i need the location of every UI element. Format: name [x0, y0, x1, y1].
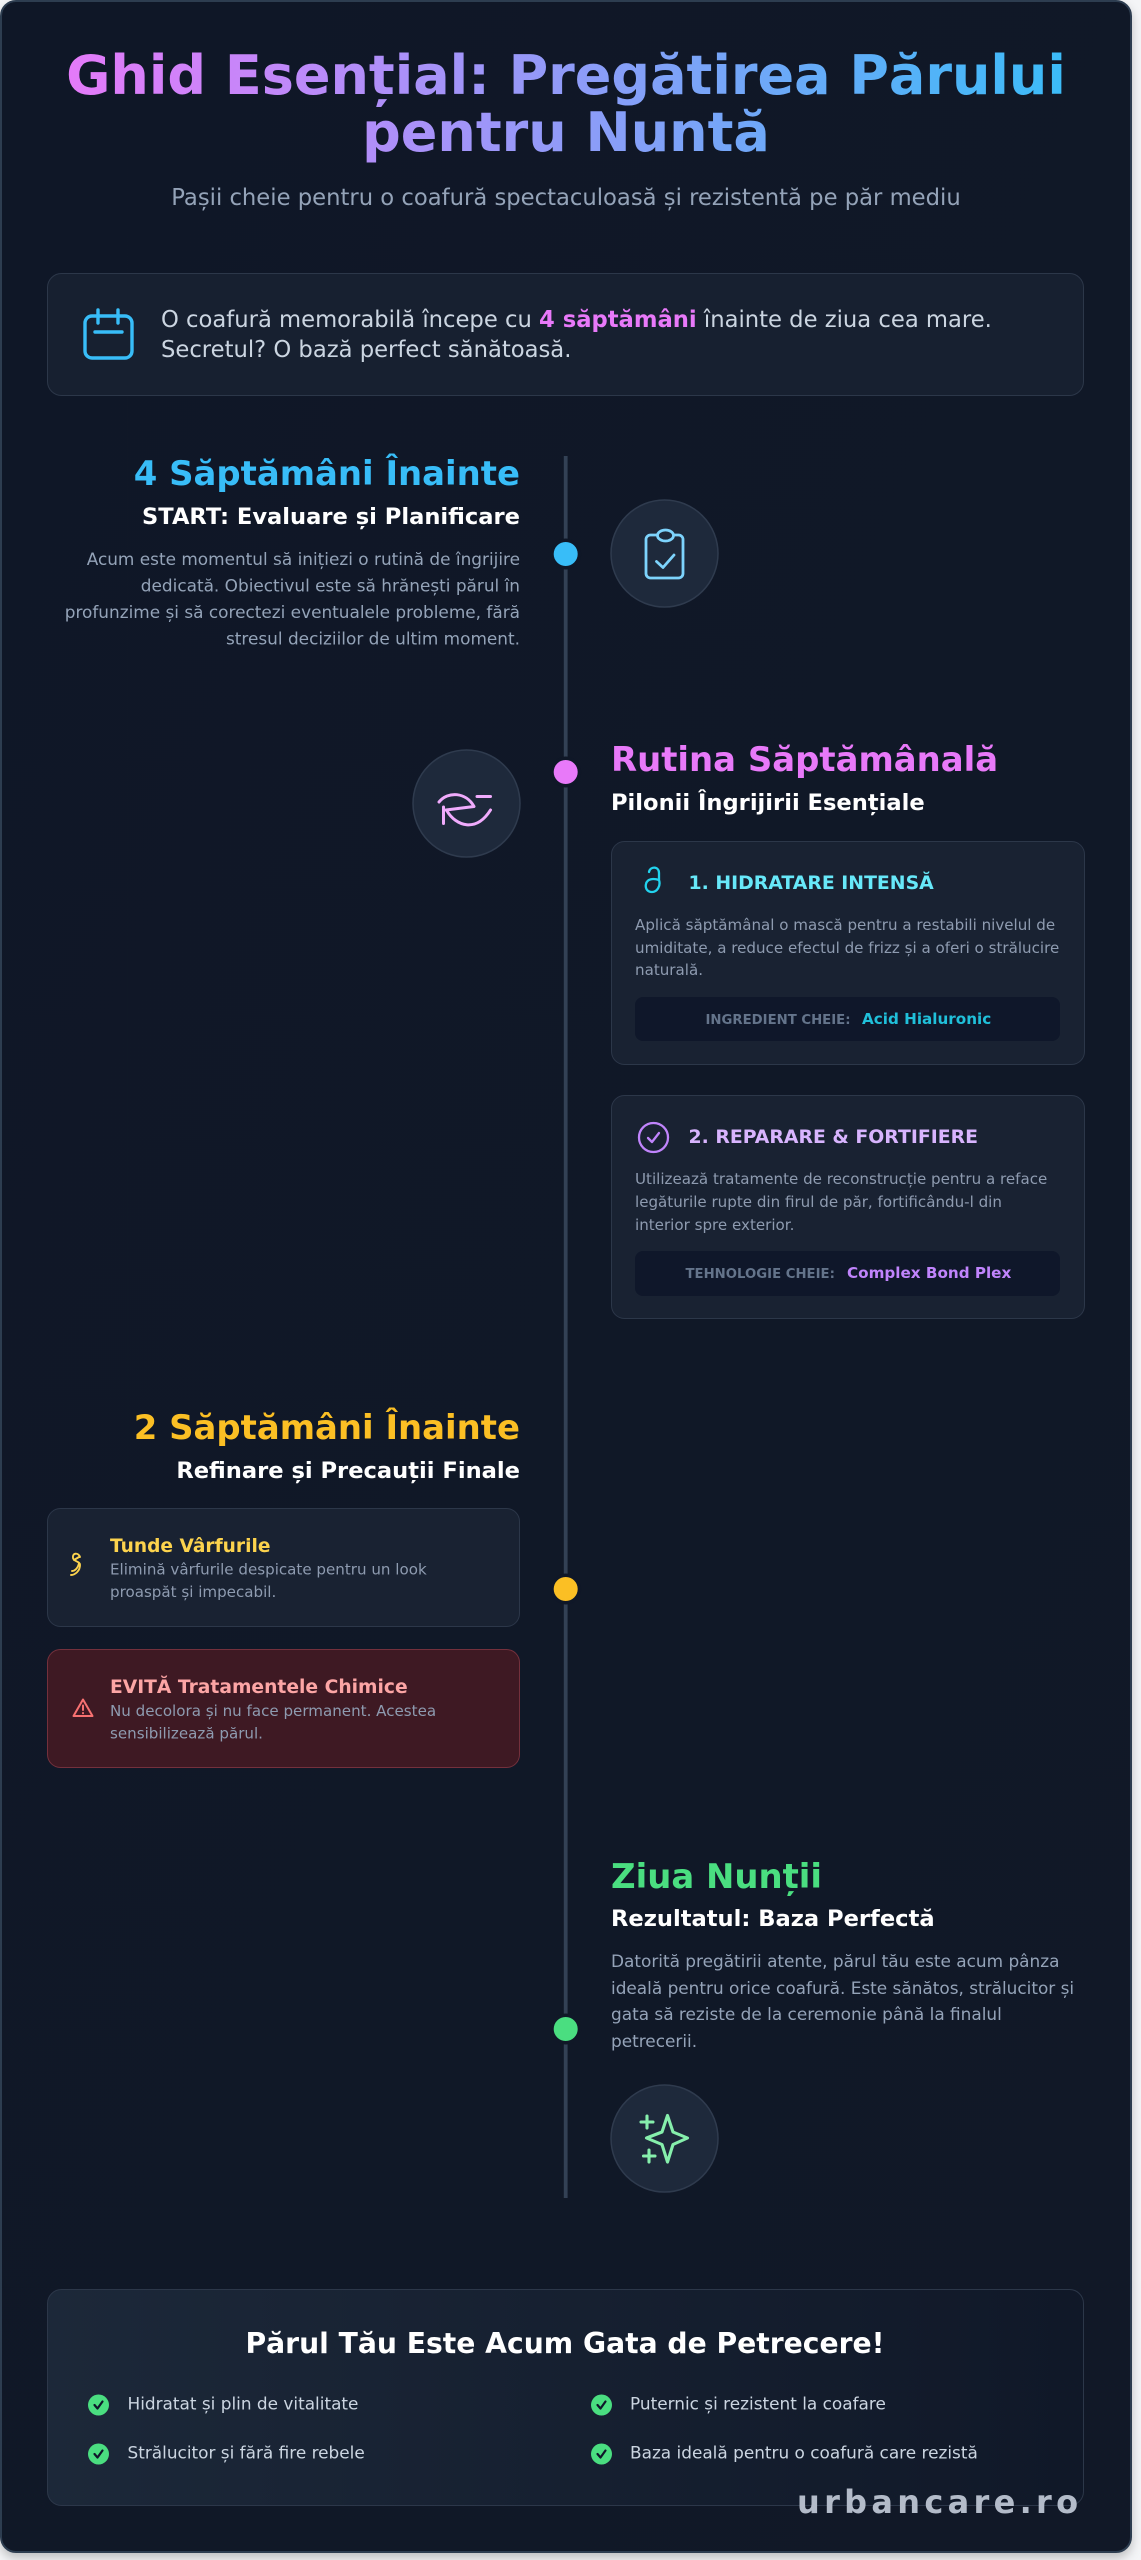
- summary heading: Părul Tău Este Acum Gata de Petrecere!: [245, 2327, 885, 2360]
- card text: Utilizează tratamente de reconstrucție pentru a reface: [635, 1170, 1047, 1188]
- key ingredient: [635, 997, 1060, 1041]
- card text: [635, 1170, 1047, 1234]
- heading: Rutina Săptămânală: [611, 740, 998, 779]
- key ingredient: INGREDIENT CHEIE:: [706, 1013, 851, 1028]
- subheading: START: Evaluare și Planificare: [142, 504, 520, 530]
- icon: warning: [74, 1700, 92, 1716]
- section: 2 weeks before: [48, 1407, 520, 1768]
- card text: sensibilizează părul.: [110, 1724, 263, 1742]
- card: repair: [612, 1096, 1084, 1318]
- key technology: TEHNOLOGIE CHEIE:: [686, 1267, 835, 1282]
- description: profunzime și să corectezi eventualele probleme, fără: [65, 602, 520, 622]
- item: hydrated: Hidratat și plin de vitalitate: [128, 2394, 358, 2414]
- timeline dot: 4 weeks: [550, 538, 581, 570]
- title: [66, 44, 1066, 164]
- description: [65, 549, 520, 648]
- watermark: urbancare.ro: [797, 2483, 1082, 2521]
- item: strong: Puternic și rezistent la coafare: [630, 2394, 886, 2414]
- key technology: [635, 1251, 1060, 1296]
- description: [611, 1951, 1074, 2051]
- card text: [110, 1702, 436, 1742]
- key ingredient: Acid Hialuronic: [862, 1010, 991, 1028]
- icon: hair strand: [646, 868, 660, 892]
- icon: sparkle: [611, 2085, 718, 2192]
- card text: naturală.: [635, 961, 703, 979]
- timeline dot: 2 weeks: [550, 1574, 581, 1604]
- intro text: Secretul? O bază perfect sănătoasă.: [161, 337, 571, 363]
- description: Acum este momentul să inițiezi o rutină de îngrijire: [87, 549, 520, 569]
- card title: EVITĂ Tratamentele Chimice: [110, 1674, 408, 1698]
- heading: 2 Săptămâni Înainte: [134, 1407, 520, 1447]
- card text: [110, 1560, 427, 1601]
- description: gata să reziste de la ceremonie până la finalul: [611, 2004, 1002, 2024]
- subtitle: Pașii cheie pentru o coafură spectaculoasă și rezistentă pe păr mediu: [171, 185, 961, 211]
- card text: legăturile rupte din firul de păr, fortificându-l din: [635, 1193, 1002, 1211]
- card title: Tunde Vârfurile: [110, 1536, 270, 1557]
- subheading: Rezultatul: Baza Perfectă: [611, 1906, 935, 1932]
- description: ideală pentru orice coafură. Este sănătos, strălucitor și: [611, 1978, 1074, 1998]
- card text: Nu decolora și nu face permanent. Acestea: [110, 1702, 436, 1720]
- item: shiny: Strălucitor și fără fire rebele: [128, 2442, 365, 2462]
- icon: leaf: [413, 750, 520, 857]
- panel: summary: [48, 2290, 1084, 2506]
- key technology: Complex Bond Plex: [847, 1264, 1011, 1282]
- card text: [635, 916, 1059, 979]
- section: weekly routine: [413, 740, 1084, 1318]
- intro text: O coafură memorabilă începe cu 4 săptămâni înainte de ziua cea mare.: [161, 307, 992, 333]
- icon: calendar: [85, 310, 132, 358]
- timeline dot: weekly routine: [550, 756, 581, 788]
- card text: proaspăt și impecabil.: [110, 1583, 276, 1601]
- description: dedicată. Obiectivul este să hrănești părul în: [141, 575, 520, 595]
- title: Ghid Esențial: Pregătirea Părului: [66, 44, 1066, 107]
- section: wedding day: [611, 1857, 1074, 2192]
- section: 4 weeks before: [65, 453, 718, 648]
- description: stresul deciziilor de ultim moment.: [226, 628, 520, 648]
- heading: Ziua Nunții: [611, 1857, 822, 1896]
- card: avoid chemicals: [48, 1650, 520, 1768]
- intro text: [161, 307, 992, 363]
- subheading: Refinare și Precauții Finale: [176, 1458, 520, 1484]
- icon: check circle: [639, 1123, 668, 1152]
- panel: intro callout: [48, 274, 1084, 396]
- card: trim ends: [48, 1508, 520, 1626]
- subheading: Pilonii Îngrijirii Esențiale: [611, 788, 925, 816]
- card text: interior spre exterior.: [635, 1216, 794, 1234]
- card text: umiditate, a reduce efectul de frizz și a oferi o strălucire: [635, 939, 1059, 957]
- description: Datorită pregătirii atente, părul tău este acum pânza: [611, 1951, 1059, 1971]
- title: pentru Nuntă: [362, 101, 770, 164]
- timeline dot: wedding day: [550, 2014, 581, 2044]
- card text: Aplică săptămânal o mască pentru a restabili nivelul de: [635, 916, 1055, 934]
- item: ideal base: Baza ideală pentru o coafură care rezistă: [630, 2442, 978, 2462]
- icon: clipboard: [611, 500, 718, 607]
- description: petrecerii.: [611, 2031, 697, 2051]
- heading: 4 Săptămâni Înainte: [134, 453, 520, 493]
- card text: Elimină vârfurile despicate pentru un look: [110, 1560, 427, 1578]
- timeline line: [564, 456, 568, 2198]
- card title: 2. REPARARE & FORTIFIERE: [688, 1127, 978, 1148]
- card title: 1. HIDRATARE INTENSĂ: [688, 870, 934, 894]
- icon: split ends: [71, 1554, 80, 1575]
- card: hydration: [612, 842, 1084, 1064]
